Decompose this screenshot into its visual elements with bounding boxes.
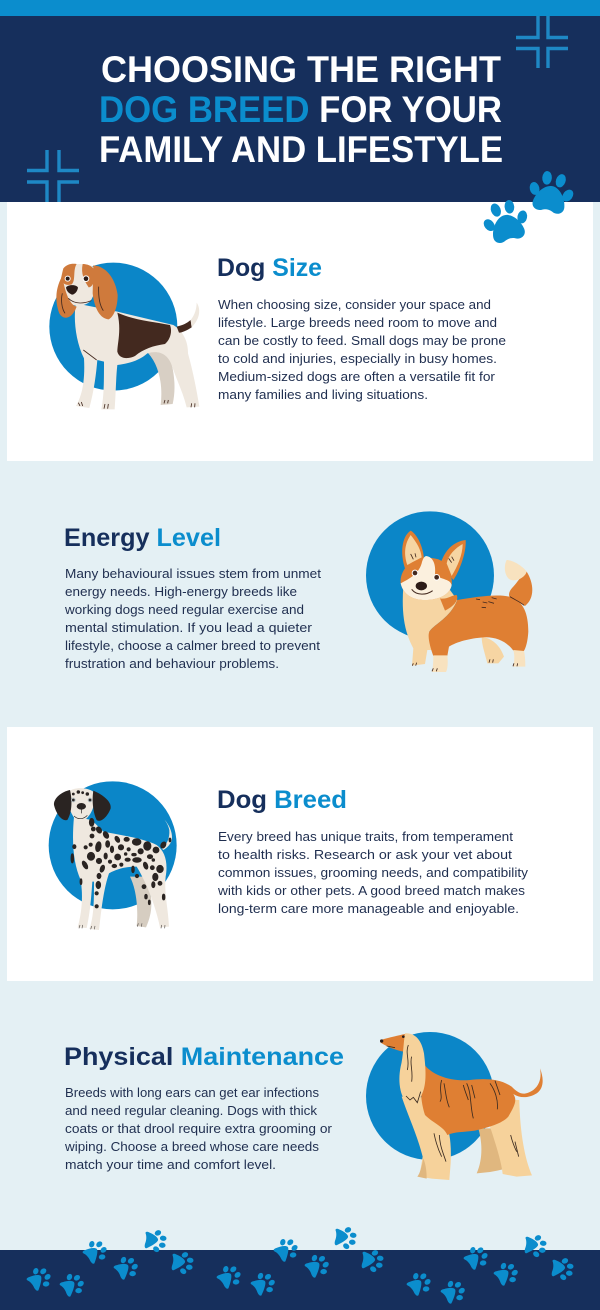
text: dog size body	[218, 297, 506, 402]
text: physical maintenance body: coats or that drool require extra grooming or	[65, 1121, 333, 1136]
icon: cross ornament left	[27, 150, 79, 202]
panel: header band	[0, 0, 600, 202]
text: dog breed body: common issues, grooming needs, and compatibility	[218, 865, 528, 880]
panel: dog breed	[7, 727, 593, 981]
text: physical maintenance body: wiping. Choose a breed whose care needs	[64, 1139, 319, 1154]
heading: dog breed: Dog Breed	[217, 786, 347, 814]
illustration: dalmatian	[49, 781, 177, 930]
text: dog size body: lifestyle. Large breeds need room to move and	[218, 315, 497, 330]
title: CHOOSING THE RIGHT	[101, 49, 501, 90]
heading: physical maintenance: Physical Maintenance	[64, 1043, 344, 1071]
illustration: corgi	[366, 511, 532, 672]
text: dog breed body: with kids or other pets. A good breed match makes	[217, 883, 525, 898]
title: FAMILY AND LIFESTYLE	[99, 129, 503, 170]
icon: header paw left	[477, 195, 534, 246]
panel: footer band	[0, 1250, 600, 1310]
text: physical maintenance body: Breeds with long ears can get ear infections	[65, 1085, 319, 1100]
text: physical maintenance body: and need regular cleaning. Dogs with thick	[65, 1103, 317, 1118]
title: DOG BREED FOR YOUR	[99, 89, 502, 130]
heading: energy level: Energy Level	[64, 524, 221, 552]
text: dog size body: Medium-sized dogs are often a versatile fit for	[218, 369, 496, 384]
text: dog size body: When choosing size, consider your space and	[218, 297, 491, 312]
icons: footer paw prints	[24, 1225, 574, 1308]
text: dog breed body	[217, 829, 528, 916]
icon: header paw right	[523, 167, 579, 217]
text: energy level body: lifestyle, choose a calmer breed to prevent	[65, 638, 320, 653]
title	[99, 49, 503, 170]
heading: dog size: Dog Size	[217, 254, 322, 282]
text: energy level body: working dogs need regular exercise and	[64, 602, 304, 617]
illustration: beagle	[49, 263, 199, 409]
text: energy level body: Many behavioural issues stem from unmet	[65, 566, 321, 581]
text: dog breed body: long-term care more manageable and enjoyable.	[218, 901, 519, 916]
text: energy level body: energy needs. High-energy breeds like	[65, 584, 297, 599]
text: physical maintenance body: match your time and comfort level.	[65, 1157, 276, 1172]
text: dog size body: can be costly to feed. Small dogs may be prone	[218, 333, 506, 348]
icon: cross ornament top right	[516, 16, 568, 68]
text: energy level body: mental stimulation. If you lead a quieter	[65, 620, 313, 635]
panel: dog size	[7, 202, 593, 461]
text: energy level body	[64, 566, 321, 671]
text: dog breed body: to health risks. Research or ask your vet about	[218, 847, 512, 862]
illustration: afghan hound	[366, 1032, 543, 1180]
text: dog size body: to cold and injuries, especially in busy homes.	[218, 351, 497, 366]
text: dog size body: many families and living situations.	[218, 387, 428, 402]
text: dog breed body: Every breed has unique traits, from temperament	[218, 829, 513, 844]
text: energy level body: frustration and behaviour problems.	[65, 656, 279, 671]
text: physical maintenance body	[64, 1085, 333, 1172]
